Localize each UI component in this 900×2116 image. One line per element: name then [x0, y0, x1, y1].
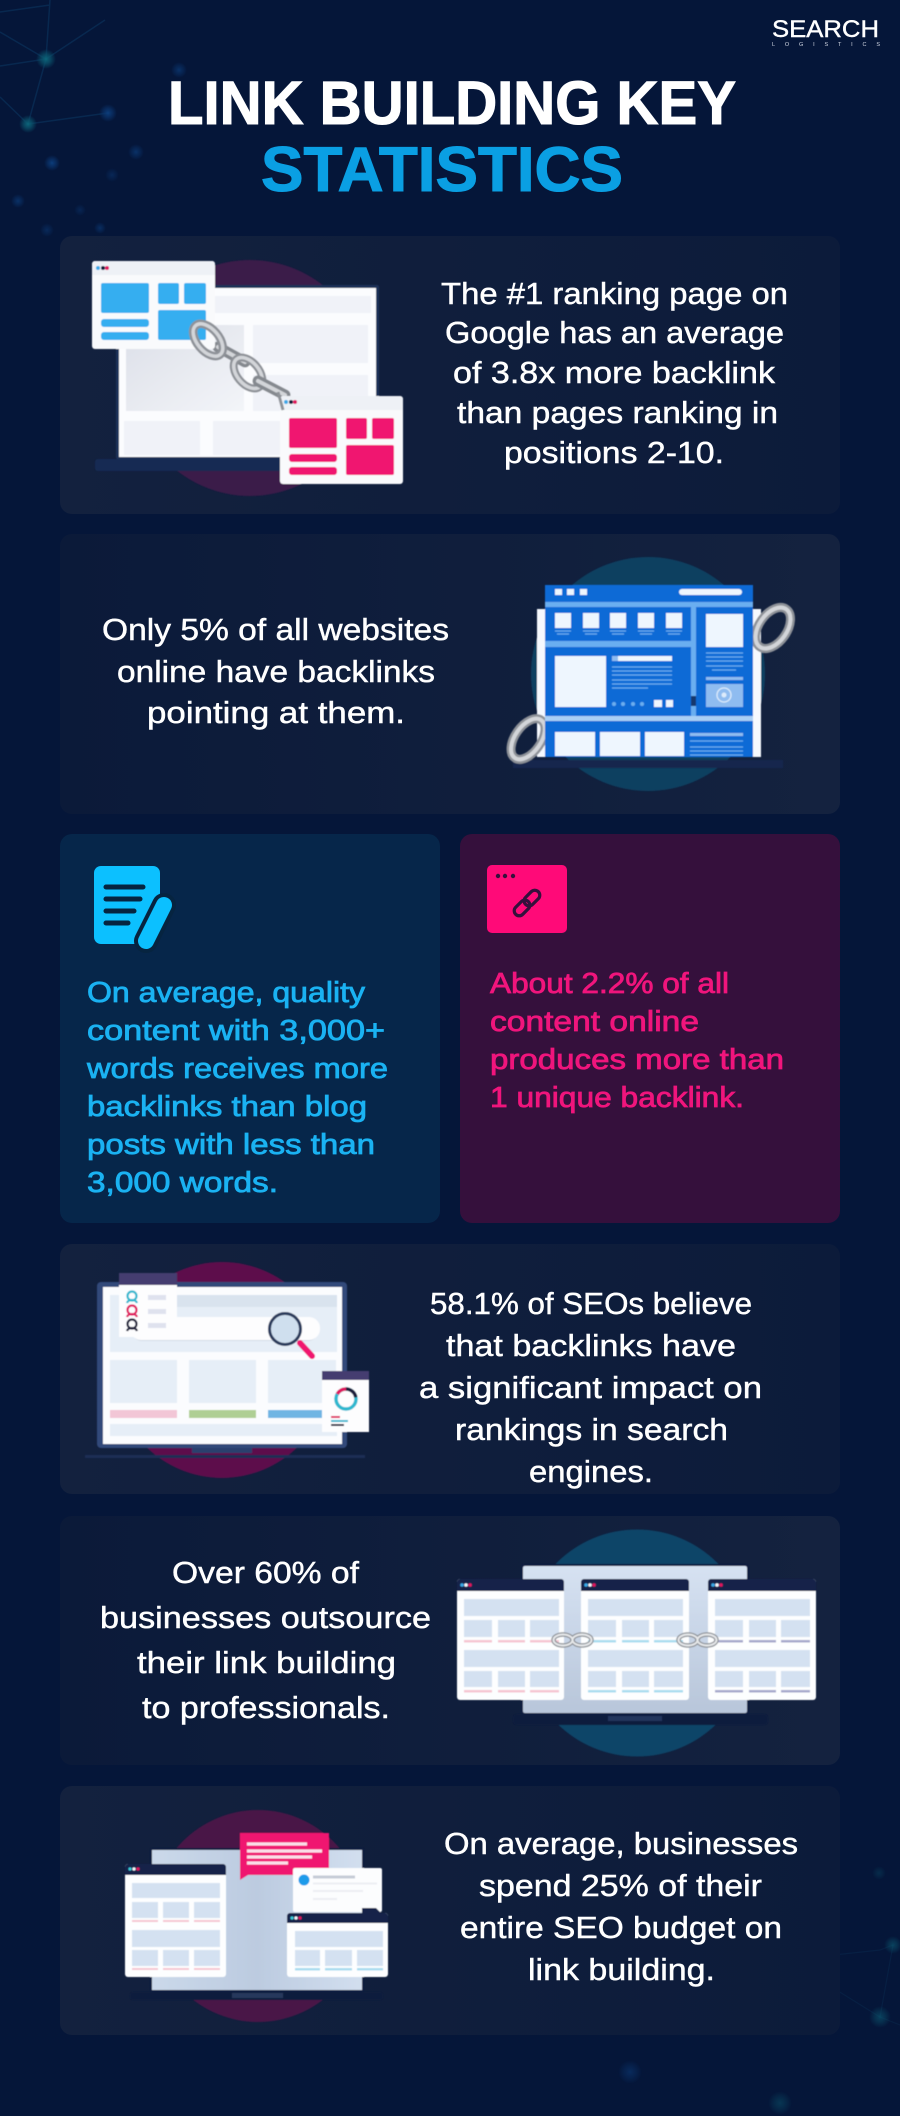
page window: middle — [581, 1579, 689, 1700]
text: unique backlink stat: 1 unique backlink. — [490, 1082, 744, 1114]
text: SEOs stat: a significant impact on — [419, 1370, 762, 1405]
illustration: pages with chat bubbles — [125, 1810, 388, 2022]
page window: left — [125, 1864, 226, 1977]
text: unique backlink stat: About 2.2% of all — [490, 968, 729, 1000]
title: STATISTICS — [261, 135, 623, 205]
panel: 2.2% of content — [460, 834, 840, 1223]
text: outsourcing stat: businesses outsource — [100, 1600, 431, 1635]
page window: right — [708, 1579, 816, 1700]
title: LINK BUILDING KEY — [168, 69, 736, 137]
text: content length stat: posts with less than — [87, 1129, 375, 1161]
text: ranking stat: than pages ranking in — [457, 395, 778, 430]
pink browser window — [278, 392, 403, 484]
text: SEOs stat: 58.1% of SEOs believe — [430, 1286, 752, 1321]
title — [168, 69, 736, 205]
icon: document with pencil — [94, 866, 164, 944]
page window: left — [457, 1579, 564, 1700]
chat bubble: white — [293, 1868, 384, 1916]
text: unique backlink stat — [490, 968, 784, 1114]
text: unique backlink stat: content online — [490, 1006, 699, 1038]
text: ranking stat: positions 2-10. — [504, 435, 724, 470]
icon: browser with link — [487, 865, 567, 933]
text: content length stat — [86, 977, 388, 1199]
illustration: three linked pages — [457, 1530, 816, 1756]
text: budget stat: On average, businesses — [444, 1826, 798, 1861]
text: SEOs stat: that backlinks have — [446, 1328, 736, 1363]
icon: magnifier — [270, 1314, 312, 1356]
text: websites stat — [102, 612, 449, 730]
illustration: blue website with chains — [504, 557, 798, 791]
text: outsourcing stat: Over 60% of — [172, 1555, 359, 1590]
chain links between pages — [554, 1634, 716, 1646]
background network: bottom right — [618, 1790, 900, 2115]
illustration: linked web pages — [92, 260, 403, 496]
page window: right — [287, 1913, 388, 1977]
panel: 3,000+ word content — [60, 834, 440, 1223]
text: ranking stat: of 3.8x more backlink — [453, 355, 776, 390]
text: unique backlink stat: produces more than — [490, 1044, 784, 1076]
text: outsourcing stat — [100, 1555, 431, 1725]
background network: top left — [0, 0, 187, 237]
text: content length stat: backlinks than blog — [87, 1091, 367, 1123]
popup: user list — [119, 1273, 177, 1337]
panel: over 60% outsource — [60, 1516, 840, 1765]
text: content length stat: 3,000 words. — [87, 1167, 278, 1199]
text: websites stat: Only 5% of all websites — [102, 612, 449, 647]
text: budget stat: link building. — [528, 1952, 715, 1987]
panel: 58.1% of SEOs — [60, 1244, 840, 1494]
panel: 25% of SEO budget — [60, 1786, 840, 2035]
text: ranking stat: Google has an average — [445, 315, 784, 350]
text: SEOs stat: engines. — [529, 1454, 653, 1489]
logo: Search Logistics: LOGISTICS — [772, 42, 880, 48]
text: outsourcing stat: their link building — [137, 1645, 396, 1680]
panel: #1 ranking page backlinks — [60, 236, 840, 514]
text: budget stat — [444, 1826, 798, 1987]
text: SEOs stat: rankings in search — [455, 1412, 728, 1447]
logo: Search Logistics: SEARCH — [772, 16, 879, 43]
text: budget stat: entire SEO budget on — [460, 1910, 782, 1945]
text: content length stat: On average, quality — [87, 977, 366, 1009]
text: content length stat: content with 3,000+ — [87, 1015, 385, 1047]
text: SEOs stat — [419, 1286, 762, 1489]
text: websites stat: online have backlinks — [117, 654, 435, 689]
text: content length stat: words receives more — [86, 1053, 388, 1085]
panel: 5% of websites — [60, 534, 840, 814]
popup: donut chart — [322, 1371, 369, 1432]
text: websites stat: pointing at them. — [147, 695, 405, 730]
text: ranking stat — [441, 276, 788, 470]
text: budget stat: spend 25% of their — [479, 1868, 762, 1903]
chat bubble: pink — [240, 1833, 329, 1880]
text: ranking stat: The #1 ranking page on — [441, 276, 788, 311]
text: outsourcing stat: to professionals. — [142, 1690, 390, 1725]
blue browser window — [92, 261, 229, 362]
illustration: search dashboard — [85, 1262, 369, 1478]
